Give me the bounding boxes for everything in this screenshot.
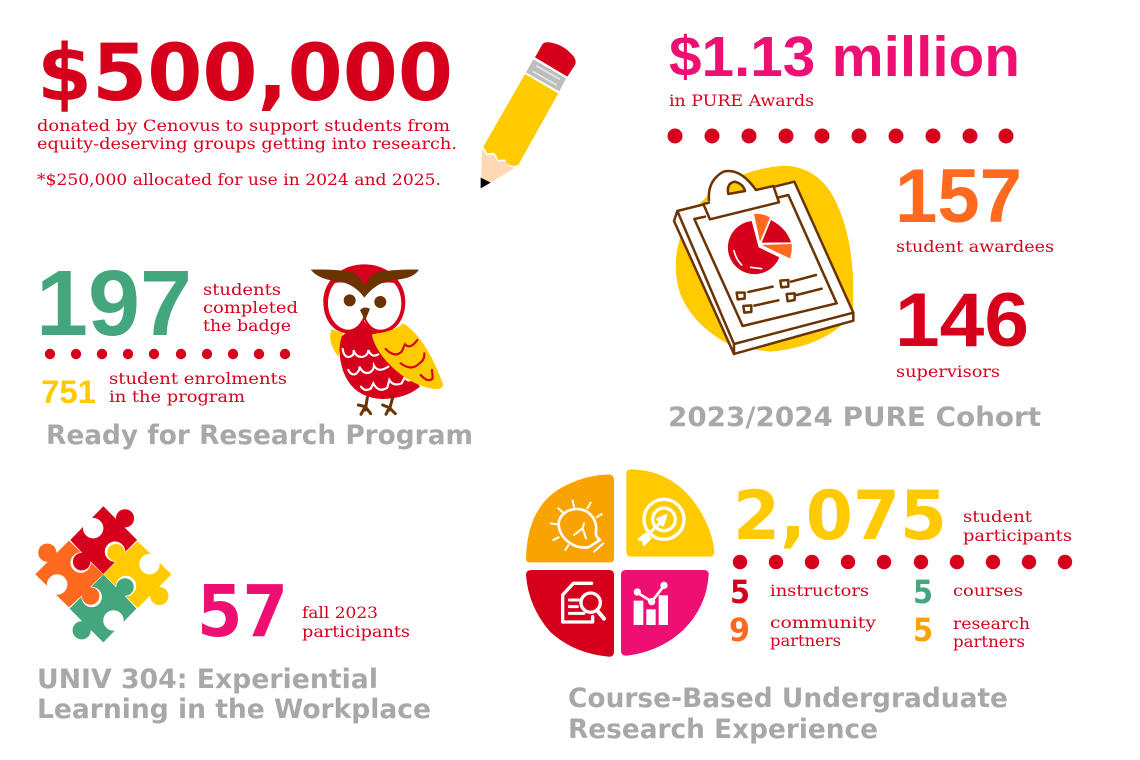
heading: UNIV 304 <box>37 664 431 725</box>
panel: UNIV 304 <box>35 506 431 725</box>
stat: 146 supervisors: 146 <box>895 278 1029 363</box>
panel: Ready for Research Program <box>36 251 473 451</box>
icon: puzzle pieces <box>35 506 172 643</box>
heading: 2023/2024 PURE Cohort: 2023/2024 PURE Cohort <box>668 402 1041 433</box>
stat: 146 supervisors: supervisors <box>896 362 1000 381</box>
stat: 5 research partners: 5 <box>913 611 933 649</box>
heading: Ready for Research Program: Ready for Research Program <box>46 420 473 451</box>
stat: 5 instructors: 5 <box>730 573 750 611</box>
stat: 751 student enrolments <box>41 369 287 410</box>
text block: allocation note: *$250,000 allocated for use in 2024 and 2025. <box>37 170 441 189</box>
stat: 5 research partners: partners <box>953 632 1025 651</box>
icon: owl <box>311 264 443 414</box>
text block: donation description <box>37 116 457 153</box>
stat: 9 community partners: community <box>770 613 876 632</box>
heading: UNIV 304: UNIV 304: Experiential <box>37 664 378 695</box>
heading: Course-Based Undergraduate Research Experience <box>568 683 1008 745</box>
icon: pencil <box>481 42 576 188</box>
stat: 5 courses: courses <box>953 581 1023 600</box>
stat: 2,075 student participants <box>733 477 1072 556</box>
heading: UNIV 304: Learning in the Workplace <box>37 694 431 725</box>
stat: 5 research partners: research <box>953 614 1030 633</box>
heading: $1.13 million: $1.13 million <box>669 25 1020 89</box>
stat: 751 student enrolments: in the program <box>109 387 245 406</box>
heading: Course-Based Undergraduate Research Experience: Course-Based Undergraduate <box>568 683 1008 714</box>
stat: 157 student awardees: student awardees <box>896 237 1054 256</box>
stat: 751 student enrolments: student enrolments <box>109 369 287 388</box>
panel: PURE cohort <box>668 25 1054 433</box>
stat: 157 student awardees: 157 <box>895 154 1022 239</box>
stat: 5 research partners <box>913 611 1030 651</box>
stat: 9 community partners: partners <box>770 631 841 650</box>
stat: 2,075 student participants: student <box>963 507 1033 526</box>
stat: 197 students completed the badge <box>36 251 298 355</box>
stat: 5 courses <box>913 573 1023 611</box>
stat: 57 fall 2023 participants <box>197 570 410 653</box>
stat: 57 fall 2023 participants: fall 2023 <box>302 603 378 622</box>
stat: 9 community partners <box>729 611 876 650</box>
heading: Course-Based Undergraduate Research Experience: Research Experience <box>568 714 878 745</box>
stat: 197 students completed the badge: completed <box>203 298 298 317</box>
icon: clipboard with pie chart <box>674 166 853 354</box>
stat: 57 fall 2023 participants: 57 <box>197 570 288 653</box>
stat: 57 fall 2023 participants: participants <box>302 622 410 641</box>
stat: 9 community partners: 9 <box>729 611 750 649</box>
text block: donation description: donated by Cenovus to support students from <box>37 116 450 135</box>
stat: 751 student enrolments: 751 <box>41 374 96 410</box>
panel: Course-Based Undergraduate Research Experience <box>526 469 1072 745</box>
panel: Cenovus donation <box>37 29 457 189</box>
stat: 197 students completed the badge: students <box>203 280 281 299</box>
stat: 197 students completed the badge: the badge <box>203 316 291 335</box>
stat: 2,075 student participants: 2,075 <box>733 477 947 556</box>
stat: 2,075 student participants: participants <box>963 526 1072 545</box>
stat: 5 instructors <box>730 573 869 611</box>
stat: 5 instructors: instructors <box>770 581 869 600</box>
stat: 197 students completed the badge: 197 <box>36 251 192 355</box>
label: in PURE Awards: in PURE Awards <box>669 91 814 110</box>
icon: four-quadrant research circle <box>526 469 714 657</box>
stat: 5 courses: 5 <box>913 573 933 611</box>
text block: donation description: equity-deserving groups getting into research. <box>37 134 457 153</box>
heading: $500,000: $500,000 <box>37 29 453 119</box>
stat: 157 student awardees <box>895 154 1054 256</box>
